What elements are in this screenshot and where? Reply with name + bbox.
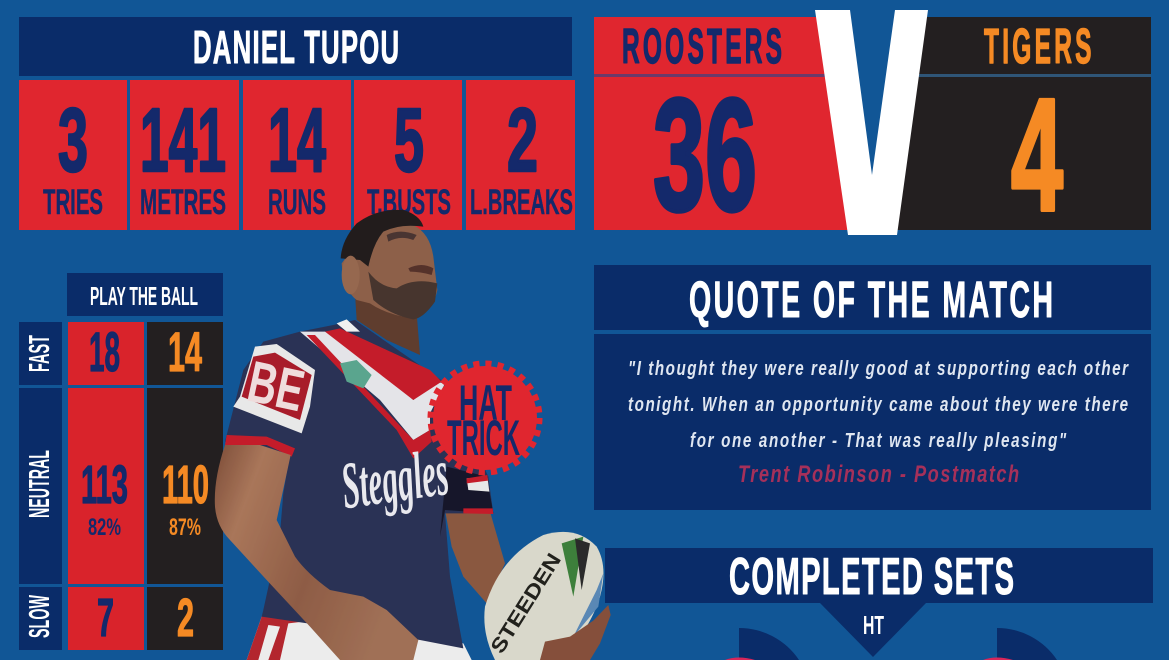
callout: hat trick	[432, 365, 538, 471]
text block: quote: "I thought they were really good at supporting each other	[628, 357, 1129, 380]
heading: player name: DANIEL TUPOU	[193, 21, 399, 73]
panel: completed sets	[605, 547, 1153, 660]
row: neutral: 113	[81, 455, 128, 515]
stat: runs: RUNS	[268, 183, 326, 222]
shorts	[247, 617, 472, 660]
panel: player stats	[19, 17, 575, 230]
panel: play the ball	[19, 273, 223, 650]
callout: hat trick: TRICK	[447, 410, 520, 466]
stat: runs: 14	[268, 91, 326, 191]
row: slow: 2	[177, 588, 194, 648]
row: slow: SLOW	[24, 595, 56, 638]
text block: quote: for one another - That was really pleasing"	[690, 429, 1067, 452]
row: slow: 7	[97, 588, 114, 648]
badge	[340, 360, 372, 388]
stat: tackle busts: T.BUSTS	[367, 183, 451, 222]
stat: tries: 3	[58, 91, 88, 191]
row: fast: FAST	[24, 335, 56, 372]
heading: quote of the match	[594, 265, 1151, 330]
panel: scoreboard	[594, 10, 1151, 244]
ball: STEEDEN	[486, 549, 566, 658]
panel: quote of the match	[594, 265, 1151, 510]
team: tigers	[880, 17, 1151, 244]
heading: completed sets	[605, 547, 1153, 605]
sleeve stripes: BE	[242, 349, 310, 424]
stat: tries	[19, 80, 127, 230]
neck	[355, 293, 420, 355]
stat: tackle busts: 5	[394, 91, 424, 191]
marker: half time: HT	[863, 610, 884, 640]
row: fast: 18	[89, 320, 120, 383]
text block: quote: Trent Robinson - Postmatch	[738, 461, 1019, 488]
stat: metres: METRES	[140, 183, 226, 222]
stat: tackle busts	[354, 80, 462, 230]
player photo illustration: Steggles	[337, 436, 453, 523]
row: neutral: NEUTRAL	[24, 450, 56, 518]
right sleeve bands	[463, 475, 493, 514]
head	[341, 210, 437, 319]
left arm	[215, 445, 418, 660]
heading: play the ball	[67, 273, 223, 316]
stat: runs	[243, 80, 351, 230]
heading: play the ball: PLAY THE BALL	[90, 281, 198, 311]
row: neutral: 87%	[169, 514, 201, 541]
team: tigers: TIGERS	[984, 20, 1092, 74]
versus mark	[815, 10, 928, 235]
stat: metres	[130, 80, 239, 230]
team: tigers: 4	[1011, 65, 1063, 244]
stat: line breaks: 2	[507, 91, 538, 191]
stat: line breaks	[466, 80, 575, 230]
team: roosters	[594, 17, 880, 244]
text block: quote	[594, 334, 1151, 510]
row: neutral: 82%	[88, 514, 121, 541]
heading: quote of the match: QUOTE OF THE MATCH	[689, 271, 1053, 328]
right hand	[540, 605, 611, 660]
donut: roosters completed sets	[725, 628, 799, 660]
heading: completed sets: COMPLETED SETS	[729, 547, 1014, 605]
jersey	[225, 320, 493, 648]
right arm	[445, 510, 505, 603]
donut: tigers completed sets	[983, 628, 1057, 660]
row: fast	[19, 320, 223, 385]
ball	[484, 532, 603, 660]
stat: line breaks: L.BREAKS	[470, 183, 573, 222]
row: neutral: 110	[162, 455, 209, 515]
text block: quote: tonight. When an opportunity came about they were there	[628, 393, 1128, 416]
callout: hat trick: HAT	[459, 375, 512, 431]
heading: player name	[19, 17, 572, 76]
player photo illustration	[215, 210, 611, 660]
sleeve stripes	[225, 344, 315, 457]
row: fast: 14	[168, 320, 202, 383]
stat: metres: 141	[140, 91, 226, 191]
row: slow	[19, 587, 223, 650]
team: roosters: ROOSTERS	[622, 20, 782, 74]
marker: half time	[820, 603, 926, 657]
row: neutral	[19, 388, 223, 584]
team: roosters: 36	[653, 65, 757, 244]
jersey chevron	[300, 319, 445, 458]
stat: tries: TRIES	[43, 183, 103, 222]
